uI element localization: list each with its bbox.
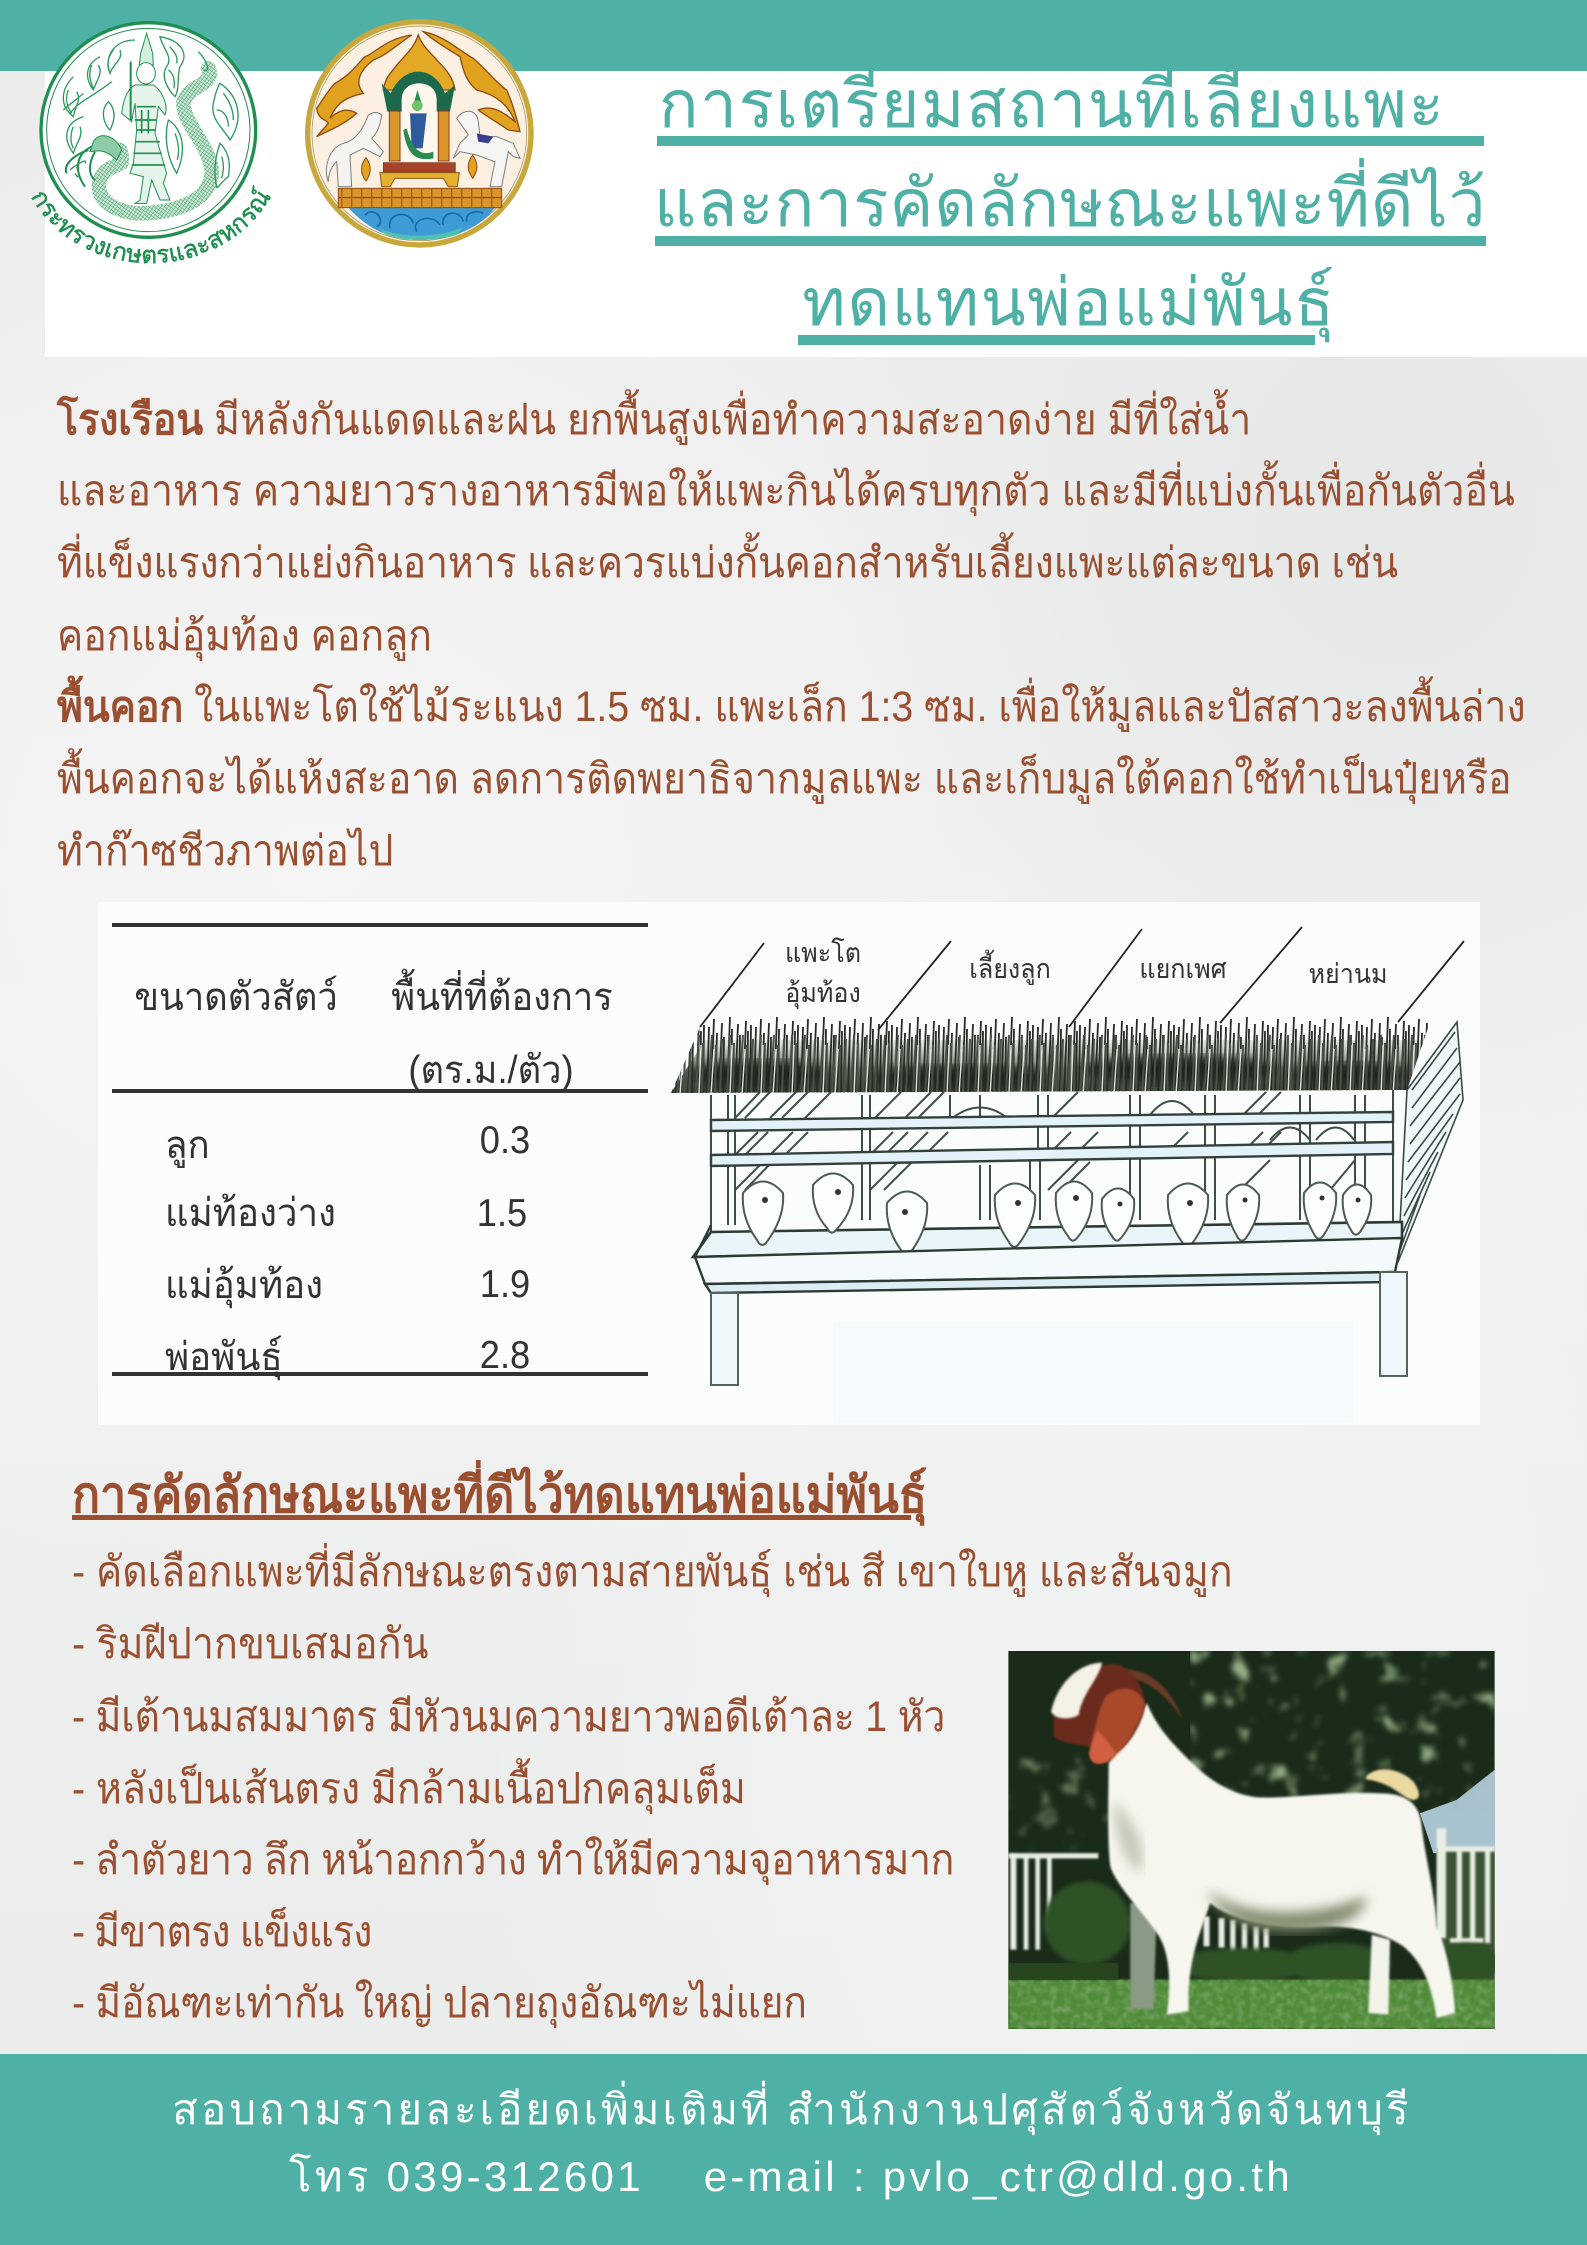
kanok ornaments: [63, 37, 238, 188]
grass texture: [1008, 1980, 1495, 2029]
shrine niche: [402, 83, 437, 162]
grass shadow: [1008, 1963, 1118, 1980]
grass: [1008, 1980, 1495, 2029]
upper rails: [711, 1112, 1393, 1166]
top teal band: [0, 0, 1587, 71]
shrubs: [1044, 1881, 1500, 1983]
text block: housing and floor description: พื้นคอก ในแพะโตใช้ไม้ระแนง 1.5 ซม. แพะเล็ก 1:3 ซม. เพื่อให้มูลและปัสสาวะลงพื้นล่าง: [57, 683, 1526, 730]
barn label pregnant: แพะโต: [785, 938, 861, 968]
shrine pillars: [389, 111, 400, 161]
text block: housing and floor description: โรงเรือน มีหลังกันแดดและฝน ยกพื้นสูงเพื่อทำความสะอาดง่าย มีที่ใส่น้ำ: [57, 396, 1251, 443]
pen slats: [711, 1090, 1393, 1240]
goat eyes: [762, 1189, 1360, 1215]
list: selection criteria: - มีอัณฑะเท่ากัน ใหญ่ ปลายถุงอัณฑะไม่แยก: [72, 1979, 807, 2026]
left ornament: [317, 35, 412, 137]
row value buck: 2.8: [480, 1334, 530, 1377]
table rule middle: [112, 1089, 648, 1093]
contact line 1: สอบถามรายละเอียดเพิ่มเติมที่ สำนักงานปศุสัตว์จังหวัดจันทบุรี: [172, 2086, 1412, 2133]
goat body: [1108, 1703, 1455, 2018]
white title panel: [45, 71, 1587, 357]
text block: housing and floor description: และอาหาร ความยาวรางอาหารมีพอให้แพะกินได้ครบทุกตัว และมีที่แบ่งกั้นเพื่อกันตัวอื่น: [57, 467, 1515, 514]
table rule bottom: [112, 1372, 648, 1376]
fence: [1008, 1828, 1495, 1953]
goat horn: [1122, 1670, 1183, 1719]
row label pregnant doe: แม่อุ้มท้อง: [165, 1264, 323, 1307]
right horse: [453, 111, 520, 187]
left horse: [326, 112, 383, 187]
rafters: [700, 927, 1464, 1030]
water: [348, 208, 495, 240]
thatch roof: [660, 1015, 1450, 1095]
right ornament: [423, 32, 520, 132]
text block: housing and floor description: ที่แข็งแรงกว่าแย่งกินอาหาร และควรแบ่งกั้นคอกสำหรับเลี้ยงแพะแต่ละขนาด เช่น: [57, 539, 1398, 586]
title line 2: และการคัดลักษณะแพะที่ดีไว้: [654, 166, 1486, 240]
list: selection criteria: - ริมฝีปากขบเสมอกัน: [72, 1620, 429, 1667]
text block: housing and floor description: คอกแม่อุ้มท้อง คอกลูก: [57, 612, 432, 659]
list: selection criteria: - มีเต้านมสมมาตร มีหัวนมความยาวพอดีเต้าละ 1 หัว: [72, 1693, 945, 1740]
list: selection criteria: - หลังเป็นเส้นตรง มีกล้ามเนื้อปกคลุมเต็ม: [72, 1765, 746, 1812]
title underline 3: [798, 335, 1315, 345]
barn label separated: แยกเพศ: [1139, 954, 1227, 984]
body shading: [1207, 1890, 1367, 1931]
distant sky: [1420, 1770, 1495, 1853]
legs: [711, 1272, 1407, 1385]
icon: livestock department seal: [305, 19, 534, 248]
icon: ministry of agriculture seal: [31, 21, 271, 264]
row label non-pregnant doe: แม่ท้องว่าง: [165, 1192, 336, 1235]
scale band: [338, 188, 502, 208]
goat heads at feeder: [743, 1174, 1371, 1255]
curved ministry name: [29, 193, 273, 263]
light blue tint behind barn: [833, 1322, 1353, 1422]
left foliage mottling: [1008, 1750, 1108, 1853]
row value pregnant doe: 1.9: [480, 1263, 530, 1306]
deity on serpent: [403, 90, 433, 159]
icon: ministry of agriculture seal: กระทรวงเกษตรและสหกรณ์: [31, 184, 271, 264]
lower background foliage: [1437, 1848, 1495, 1980]
left small flame: [362, 158, 370, 181]
right small flame: [468, 155, 477, 178]
title underline 1: [657, 136, 1484, 146]
table header size: ขนาดตัวสัตว์: [134, 976, 338, 1019]
list: selection criteria: - คัดเลือกแพะที่มีลักษณะตรงตามสายพันธุ์ เช่น สี เขาใบหู และสันจมูก: [72, 1548, 1233, 1595]
shrine spire: [383, 35, 455, 90]
title underline 2: [655, 236, 1486, 246]
section heading: selecting good breeding goats: การคัดลักษณะแพะที่ดีไว้ทดแทนพ่อแม่พันธุ์: [72, 1467, 927, 1523]
text block: housing and floor description: [56, 389, 1526, 874]
goat far legs: [1130, 1903, 1157, 2010]
serpent crest: [66, 147, 95, 187]
barn label weaned: หย่านม: [1308, 959, 1388, 989]
goat head: [1054, 1664, 1144, 1753]
title: [654, 67, 1486, 345]
panel: space table and barn illustration: [98, 902, 1480, 1425]
slanted wall on right: [1398, 1022, 1463, 1262]
serpent body: [99, 68, 212, 213]
row label kid: ลูก: [165, 1124, 210, 1167]
list: selection criteria: [72, 1543, 1233, 2028]
saddle: [477, 133, 493, 143]
row label buck: พ่อพันธุ์: [165, 1336, 283, 1379]
red base: [383, 163, 455, 172]
serpent head: [90, 136, 122, 160]
footer band: [0, 2054, 1587, 2245]
list: selection criteria: - มีขาตรง แข็งแรง: [72, 1908, 372, 1955]
title line 1: การเตรียมสถานที่เลี้ยงแพะ: [659, 67, 1445, 141]
table header unit: (ตร.ม./ตัว): [408, 1049, 574, 1092]
trough back: [693, 1222, 1402, 1257]
goat ear: [1089, 1689, 1145, 1763]
contact line 2: โทร 039-312601 e-mail : pvlo_ctr@dld.go.th: [289, 2153, 1293, 2200]
list: selection criteria: - ลำตัวยาว ลึก หน้าอกกว้าง ทำให้มีความจุอาหารมาก: [72, 1836, 954, 1883]
barn label nursing: เลี้ยงลูก: [969, 954, 1051, 984]
title line 3: ทดแทนพ่อแม่พันธุ์: [802, 265, 1336, 339]
feeder trough: [695, 1225, 1402, 1293]
shrine green arch: [382, 72, 455, 112]
table header area: พื้นที่ที่ต้องการ: [391, 976, 613, 1019]
throne: [380, 173, 459, 187]
barn label pregnant 2: อุ้มท้อง: [785, 978, 861, 1008]
goat tail: [1366, 1769, 1419, 1800]
row value non-pregnant doe: 1.5: [477, 1192, 527, 1235]
photo: boer goat: [1008, 1651, 1495, 2029]
deity figure: [122, 33, 170, 203]
table rule top: [112, 923, 648, 927]
foliage mottling: [1190, 1651, 1495, 1810]
illustration: raised goat barn: [671, 926, 1465, 1386]
row value kid: 0.3: [480, 1119, 530, 1162]
text block: housing and floor description: ทำก๊าซชีวภาพต่อไป: [57, 827, 393, 874]
text block: housing and floor description: พื้นคอกจะได้แห้งสะอาด ลดการติดพยาธิจากมูลแพะ และเก็บมูลใต้คอกใช้ทำเป็นปุ๋ยหรือ: [57, 755, 1512, 802]
